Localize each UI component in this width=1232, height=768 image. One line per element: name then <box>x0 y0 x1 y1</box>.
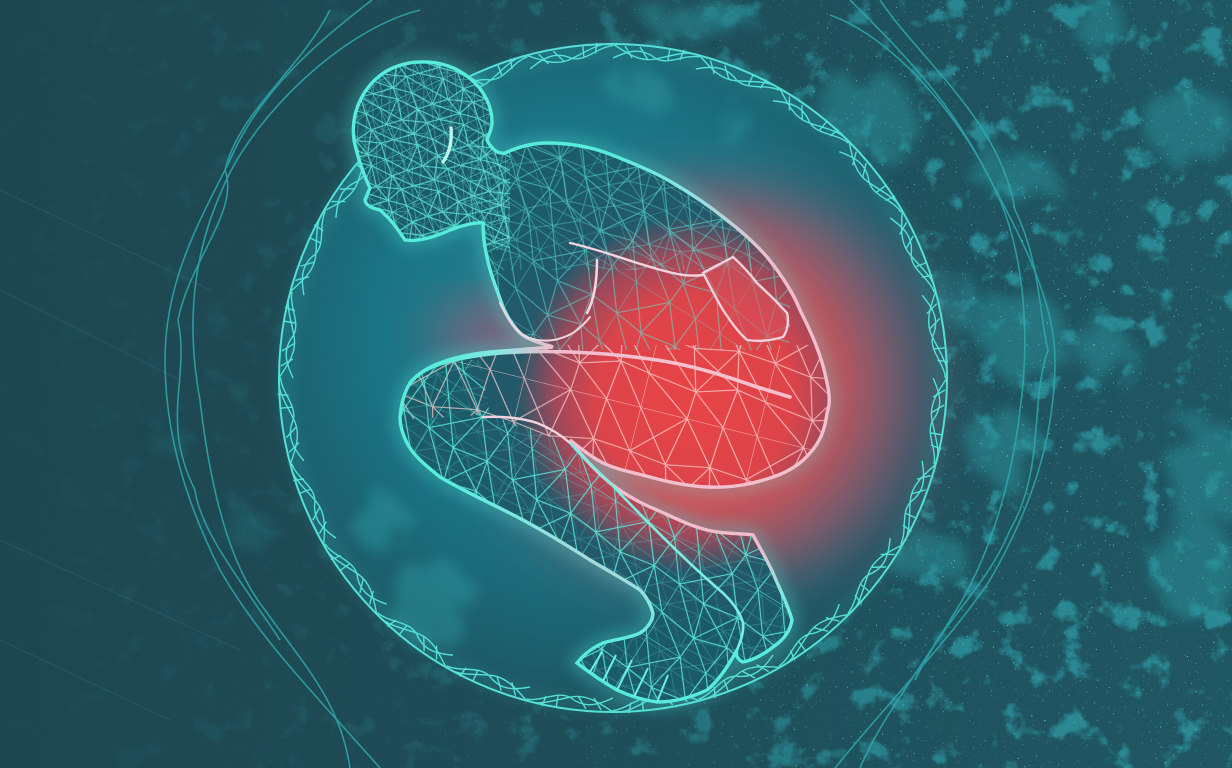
figure: ear <box>443 128 451 162</box>
figure: outer glow <box>353 62 829 702</box>
wireframe mesh: head and torso <box>340 50 790 350</box>
wireframe mesh: lower leg and feet <box>395 360 800 710</box>
circle interior glow <box>279 44 947 712</box>
lattice ring glow <box>285 50 941 706</box>
lattice ring <box>268 33 958 723</box>
figure: hand <box>703 257 788 341</box>
wireframe mesh: thigh <box>400 345 830 495</box>
background scratches <box>0 190 1200 720</box>
background texture: large teal patches <box>146 0 1232 620</box>
figure: toes <box>590 652 668 702</box>
figure: crouching body <box>340 50 830 710</box>
figure: front leg contour <box>570 443 743 650</box>
outer strands: right braid <box>830 0 1055 768</box>
figure: inner contour lines <box>410 243 790 443</box>
interior teal clouds <box>354 70 747 645</box>
red glow <box>430 180 967 590</box>
outer strands: left braid <box>165 0 420 768</box>
figure outline <box>353 62 829 702</box>
